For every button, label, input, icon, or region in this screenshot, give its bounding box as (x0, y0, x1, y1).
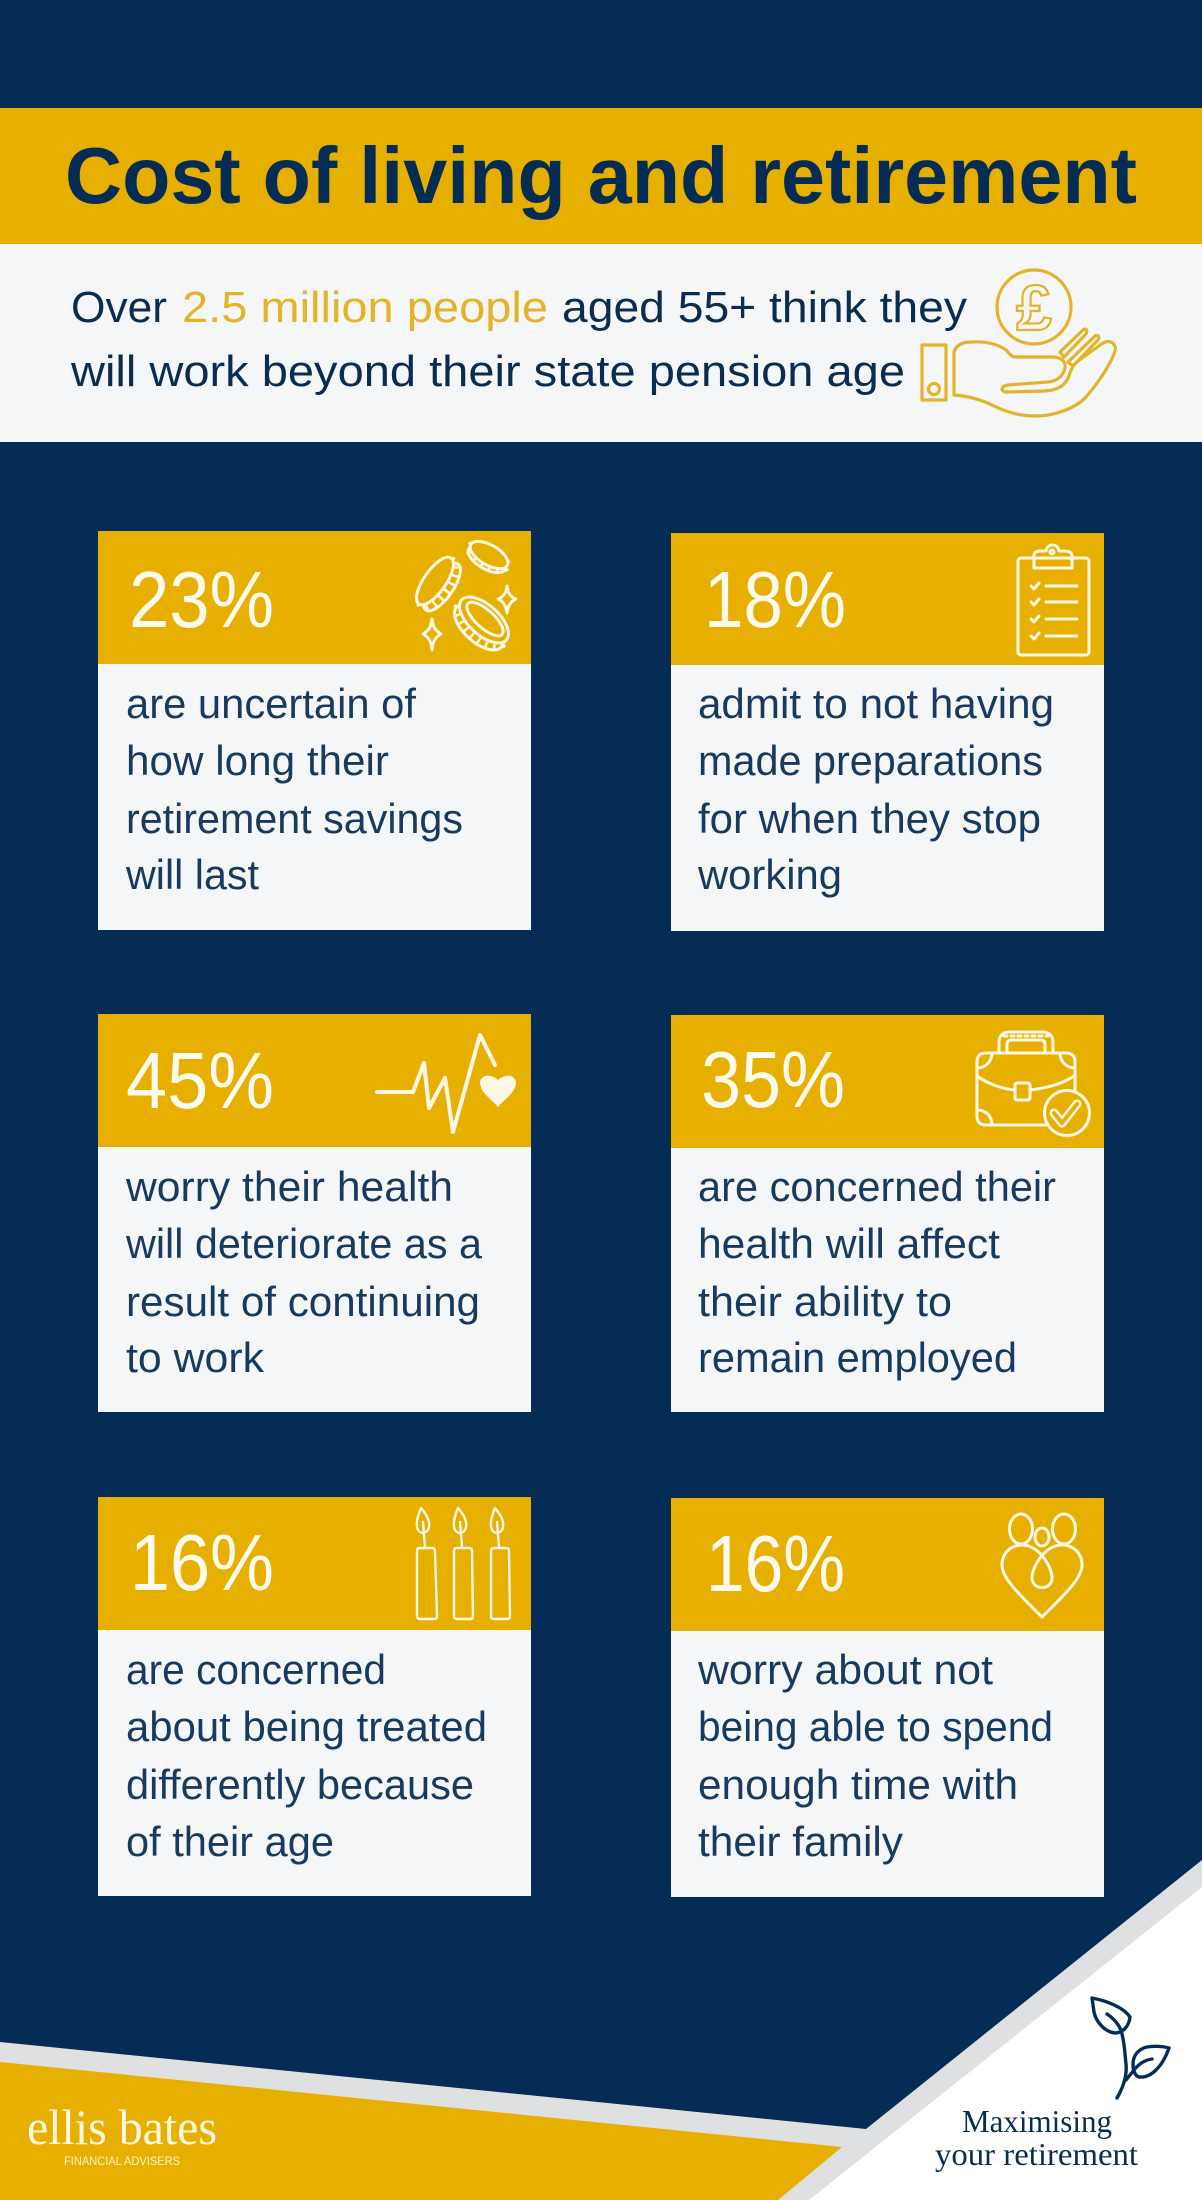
panel: 16% age treatment (98, 1497, 531, 1896)
description: worry about not (697, 1646, 993, 1693)
description: enough time with (698, 1761, 1018, 1808)
icon: plant sprig (1092, 1998, 1169, 2098)
description: will deteriorate as a (125, 1220, 483, 1267)
description: their family (698, 1818, 903, 1865)
icon: hand holding pound coin (922, 270, 1115, 416)
icon: coins (410, 536, 516, 658)
tagline (935, 2103, 1138, 2172)
statistic: 16% (706, 1519, 845, 1608)
subtitle text: will work beyond their state pension age (70, 347, 905, 396)
description: their ability to (698, 1278, 952, 1325)
description: being able to spend (698, 1703, 1053, 1750)
statistic: 35% (701, 1035, 845, 1124)
description: are concerned (126, 1646, 386, 1693)
subtitle panel (0, 244, 1202, 442)
description: are uncertain of (126, 680, 416, 727)
title: Cost of living and retirement (65, 131, 1137, 220)
description: result of continuing (126, 1278, 480, 1325)
description: to work (126, 1334, 265, 1381)
statistic: 23% (129, 555, 274, 644)
description (697, 1646, 1053, 1865)
description (126, 1646, 487, 1865)
description (125, 1163, 483, 1381)
icon: family heart (1002, 1514, 1082, 1617)
icon: heartbeat with heart (377, 1035, 516, 1132)
tagline: your retirement (935, 2136, 1138, 2172)
panel: 45% health deterioration (98, 1014, 531, 1412)
description: health will affect (698, 1220, 1000, 1267)
icon: clipboard checklist (1018, 545, 1089, 655)
logo: ellis bates: ellis bates (27, 2099, 217, 2155)
description (125, 680, 463, 898)
statistic: 16% (130, 1518, 274, 1607)
subtitle text (70, 283, 967, 396)
statistic: 45% (126, 1036, 274, 1125)
description: remain employed (698, 1334, 1017, 1381)
description: about being treated (126, 1703, 487, 1750)
description (698, 1163, 1056, 1381)
description: retirement savings (126, 795, 463, 842)
description: made preparations (698, 737, 1043, 784)
statistic: 18% (704, 555, 846, 644)
description: will last (125, 851, 259, 898)
description: are concerned their (698, 1163, 1056, 1210)
subtitle text: aged 55+ think they (562, 283, 967, 332)
panel: 18% no preparations (671, 533, 1104, 931)
description: worry their health (125, 1163, 453, 1210)
description: how long their (126, 737, 389, 784)
description: of their age (126, 1818, 334, 1865)
icon: briefcase with check (977, 1032, 1090, 1136)
panel: 16% family time (671, 1498, 1104, 1897)
panel: 35% employment concerns (671, 1015, 1104, 1412)
description: for when they stop (698, 795, 1041, 842)
footer: grey accent band (0, 1860, 1202, 2200)
icon: three candles (417, 1508, 510, 1619)
icon: hand holding pound coin: £ (1016, 272, 1052, 344)
logo: ellis bates: FINANCIAL ADVISERS (64, 2154, 180, 2168)
subtitle text: 2.5 million people (182, 283, 548, 332)
subtitle text: Over (71, 283, 167, 332)
description: differently because (126, 1761, 474, 1808)
description: working (697, 851, 842, 898)
panel: 23% uncertain savings (98, 531, 531, 930)
footer: gold brand panel (0, 2062, 842, 2200)
tagline: Maximising (962, 2103, 1112, 2139)
footer: white corner panel (809, 1887, 1202, 2200)
description: admit to not having (698, 680, 1054, 727)
description (697, 680, 1054, 898)
title band (0, 108, 1202, 244)
